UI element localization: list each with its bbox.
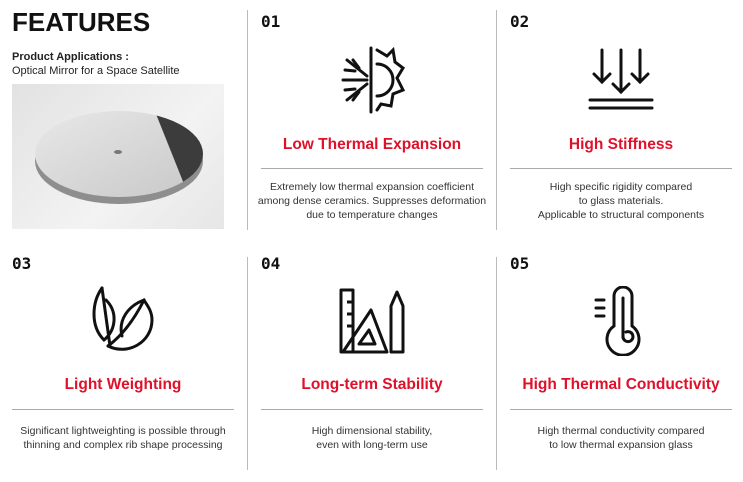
product applications text: Product Applications :: [12, 51, 129, 63]
description: [312, 425, 432, 451]
panel: 04 long-term stability: [261, 254, 483, 451]
number 02: 02: [510, 12, 529, 31]
heading: Long-term Stability: [301, 376, 443, 393]
heading: High Thermal Conductivity: [522, 376, 720, 393]
description: even with long-term use: [316, 439, 428, 451]
icon: feathers: [92, 286, 154, 351]
icon: thermometer: [594, 286, 640, 356]
title: FEATURES: [12, 7, 150, 37]
description: to low thermal expansion glass: [549, 439, 693, 451]
dividers: [247, 10, 248, 230]
icon: ruler, triangle, pencil: [340, 288, 404, 354]
description: High thermal conductivity compared: [538, 425, 704, 437]
product image: mirror: [12, 84, 224, 229]
heading: Light Weighting: [65, 376, 181, 393]
number 03: 03: [12, 254, 31, 273]
panel: 02 high stiffness: [510, 12, 732, 221]
panel: 05 high thermal conductivity: [510, 254, 732, 451]
icon: arrows down: [588, 48, 654, 110]
description: to glass materials.: [579, 195, 663, 207]
description: High dimensional stability,: [312, 425, 432, 437]
panel: 01 low thermal expansion: [258, 12, 486, 221]
number 04: 04: [261, 254, 280, 273]
number 01: 01: [261, 12, 280, 31]
heading: High Stiffness: [569, 136, 673, 153]
description: Applicable to structural components: [538, 209, 704, 221]
description: [538, 181, 704, 221]
description: Extremely low thermal expansion coefficient among dense ceramics. Suppresses deformation due to temperature changes: [258, 181, 486, 221]
icon: snowflake sun: [342, 46, 405, 114]
description: [538, 425, 704, 451]
panel: 03 light weighting: [12, 254, 234, 451]
description: High specific rigidity compared: [550, 181, 692, 193]
heading: Low Thermal Expansion: [283, 136, 461, 153]
description: Significant lightweighting is possible through thinning and complex rib shape processing: [20, 425, 226, 451]
number 05: 05: [510, 254, 529, 273]
product applications text: [12, 51, 180, 77]
product applications text: Optical Mirror for a Space Satellite: [12, 65, 180, 77]
